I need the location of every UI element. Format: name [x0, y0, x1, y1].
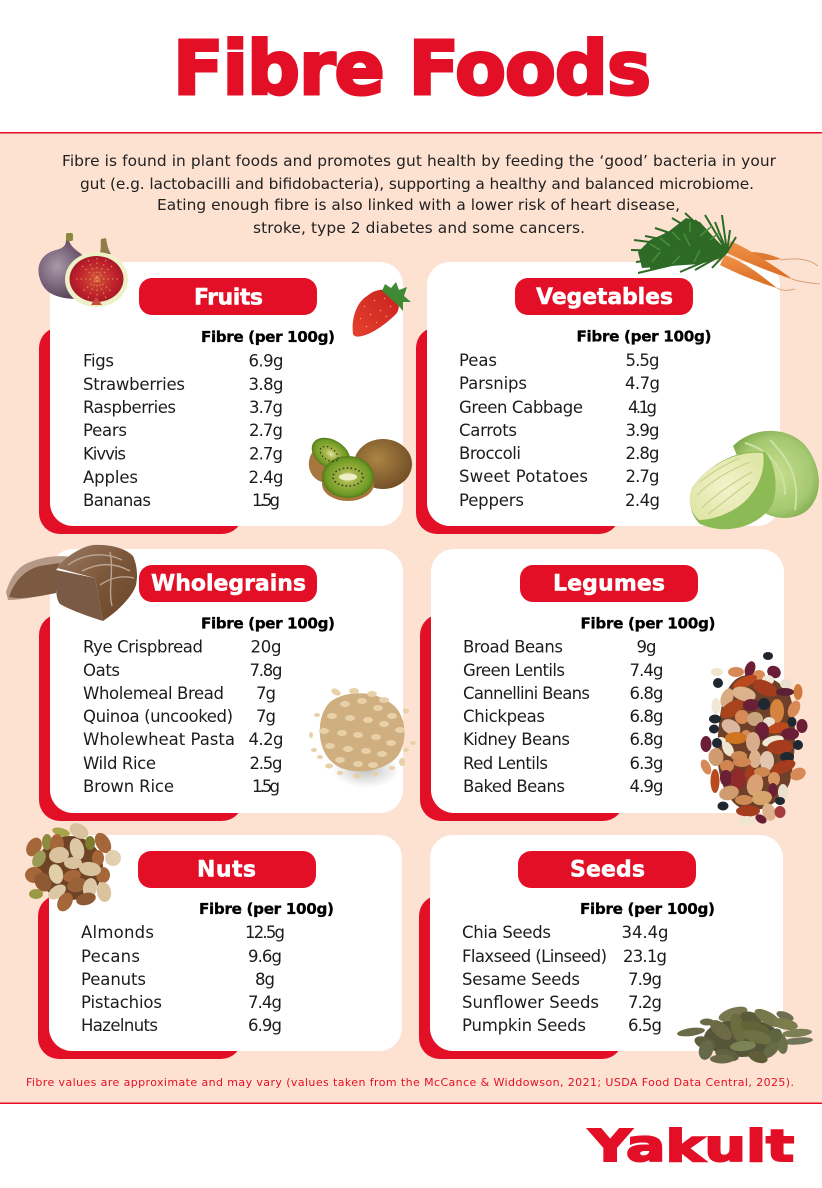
food table: 3.8g	[248, 375, 284, 394]
food table: Oats	[83, 661, 120, 680]
food table: 6.8g	[630, 730, 664, 749]
food table: Hazelnuts	[81, 1016, 158, 1035]
intro text: Fibre is found in plant foods and promotes gut health by feeding the ‘good’ bacteria in your	[62, 152, 777, 170]
food table: 3.7g	[249, 398, 283, 417]
food table: 5.5g	[626, 351, 660, 370]
food table: 20g	[250, 638, 282, 656]
food table: Pears	[83, 421, 127, 440]
column header: Fibre (per 100g)	[201, 328, 335, 346]
heading: seeds: Seeds	[570, 858, 645, 882]
heading: nuts: Nuts	[197, 858, 256, 882]
food table: Chia Seeds	[462, 923, 551, 942]
panel: vegetables	[416, 262, 780, 534]
title: Fibre Foods	[173, 26, 651, 112]
heading: legumes	[520, 565, 698, 602]
food table: Kivvis	[83, 444, 126, 464]
food table: Apples	[83, 468, 138, 487]
column header: Fibre (per 100g)	[580, 900, 715, 918]
heading: fruits	[139, 278, 317, 315]
food table: 9g	[636, 638, 656, 656]
food table: 2.5g	[250, 754, 282, 773]
food table: 7.4g	[630, 661, 664, 680]
food table: 7.4g	[248, 993, 282, 1012]
intro text: Eating enough fibre is also linked with a lower risk of heart disease,	[157, 196, 680, 214]
icon: cabbage	[690, 431, 819, 529]
panel: seeds	[419, 835, 783, 1059]
icon: strawberry	[353, 282, 411, 337]
food table: Bananas	[83, 491, 151, 510]
food table: 4.9g	[630, 777, 664, 796]
heading: nuts	[138, 851, 316, 888]
food table: 7.2g	[628, 993, 662, 1012]
column header: Fibre (per 100g)	[580, 614, 716, 632]
column header: Fibre (per 100g)	[201, 614, 335, 632]
food table: 2.7g	[626, 467, 660, 486]
food table: 1.5g	[252, 777, 280, 796]
food table: 34.4g	[622, 923, 668, 942]
intro text: gut (e.g. lactobacilli and bifidobacteria), supporting a healthy and balanced microbiome.	[80, 175, 754, 193]
food table: Red Lentils	[463, 754, 548, 773]
food table: Wild Rice	[83, 754, 156, 773]
food table: 8g	[255, 970, 275, 989]
food table: Pecans	[81, 947, 140, 966]
panel: nuts	[38, 835, 402, 1059]
food table: Sesame Seeds	[462, 970, 580, 989]
food table: Carrots	[459, 421, 517, 440]
heading: legumes: Legumes	[553, 572, 665, 596]
food table: 2.7g	[249, 444, 283, 464]
food table: Chickpeas	[463, 707, 545, 726]
heading: vegetables	[515, 278, 693, 315]
icon: nuts	[23, 820, 121, 914]
food table: 3.9g	[626, 421, 660, 440]
food table: Pistachios	[81, 993, 162, 1012]
icon: pumpkin seeds	[677, 1004, 813, 1066]
heading: fruits: Fruits	[194, 286, 263, 310]
food table: 6.3g	[630, 754, 664, 773]
footer band	[0, 1102, 822, 1188]
food table: 6.5g	[628, 1016, 662, 1035]
icon: figs	[38, 233, 128, 307]
icon: oats	[309, 687, 416, 788]
heading: wholegrains: Wholegrains	[151, 572, 306, 596]
heading: vegetables: Vegetables	[536, 285, 673, 310]
food table	[83, 638, 284, 796]
food table: Green Lentils	[463, 661, 565, 680]
icon: carrots	[631, 213, 820, 290]
food table	[463, 638, 664, 796]
intro text: stroke, type 2 diabetes and some cancers.	[253, 219, 585, 237]
food table: 7.8g	[250, 661, 282, 680]
food table: Sunflower Seeds	[462, 993, 599, 1012]
food table: Figs	[83, 352, 114, 370]
food table: Flaxseed (Linseed)	[462, 947, 607, 966]
food table: Brown Rice	[83, 777, 174, 796]
food table: Sweet Potatoes	[459, 467, 588, 486]
food table: 2.4g	[625, 491, 660, 510]
food table: 9.6g	[248, 947, 282, 966]
food table	[81, 923, 285, 1035]
panel: fruits	[39, 262, 403, 534]
column header: Fibre (per 100g)	[576, 328, 712, 346]
food table: Broad Beans	[463, 638, 563, 656]
food table: 6.8g	[630, 684, 664, 703]
food table	[462, 923, 668, 1035]
food table: 6.8g	[630, 707, 664, 726]
food table: Baked Beans	[463, 777, 565, 796]
food table: Peas	[459, 351, 497, 370]
heading: wholegrains	[139, 565, 317, 602]
food table: 4.2g	[248, 730, 284, 749]
food table: Quinoa (uncooked)	[83, 707, 233, 726]
panel: legumes	[420, 549, 784, 821]
food table: 2.8g	[626, 444, 660, 463]
food table: 6.9g	[248, 352, 284, 370]
panel: wholegrains	[39, 549, 403, 821]
food table: Raspberries	[83, 398, 176, 417]
logo: Yakult: Yakult	[588, 1121, 794, 1172]
food table: Parsnips	[459, 374, 527, 393]
food table: 4.7g	[625, 374, 660, 393]
icon: kiwi	[302, 431, 412, 501]
food table: 2.7g	[249, 421, 283, 440]
food table: Kidney Beans	[463, 730, 570, 749]
footnote: Fibre values are approximate and may vary (values taken from the McCance & Widdowson, 2021; USDA Food Data Central, 2025).	[26, 1076, 794, 1089]
food table: Peppers	[459, 491, 524, 510]
heading: seeds	[518, 851, 696, 888]
food table	[83, 352, 284, 510]
food table: Broccoli	[459, 444, 521, 463]
food table: 6.9g	[248, 1016, 282, 1035]
food table: 1.5g	[252, 491, 280, 510]
food table: Strawberries	[83, 375, 185, 394]
food table	[459, 351, 660, 510]
food table: 7.9g	[628, 970, 662, 989]
food table: 4.1g	[628, 398, 657, 417]
food table: 7g	[256, 684, 276, 703]
food table: Almonds	[81, 923, 154, 942]
icon: mixed beans	[699, 652, 808, 826]
food table: Peanuts	[81, 970, 146, 989]
header band	[0, 0, 822, 134]
food table: Wholewheat Pasta	[83, 730, 235, 749]
food table: 23.1g	[623, 947, 667, 966]
food table: 2.4g	[248, 468, 284, 487]
food table: Rye Crispbread	[83, 638, 203, 656]
column header: Fibre (per 100g)	[199, 900, 334, 918]
food table: 12.5g	[245, 923, 285, 942]
food table: Pumpkin Seeds	[462, 1016, 586, 1035]
food table: Cannellini Beans	[463, 684, 590, 703]
food table: Green Cabbage	[459, 398, 583, 417]
icon: bread	[6, 545, 137, 621]
food table: Wholemeal Bread	[83, 684, 224, 703]
food table: 7g	[256, 707, 276, 726]
intro text	[62, 152, 777, 237]
